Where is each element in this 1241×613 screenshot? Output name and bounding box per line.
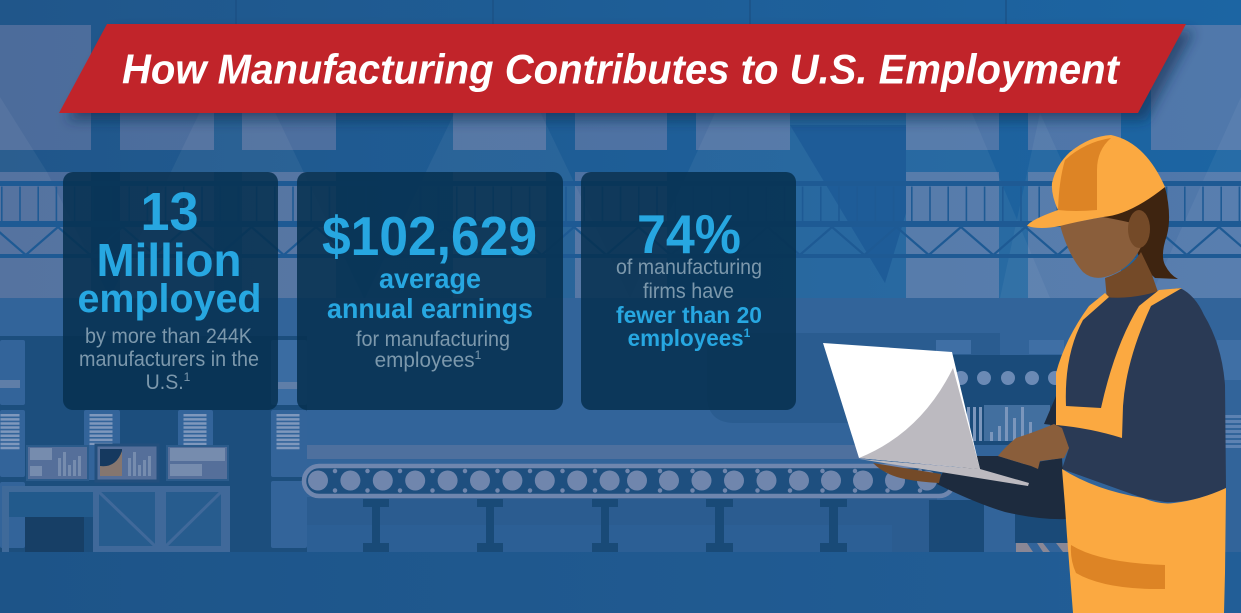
icon: ear bbox=[1128, 210, 1150, 248]
apron bbox=[1056, 288, 1226, 613]
panel: average annual earnings: annual earnings bbox=[327, 293, 533, 324]
monitors bbox=[27, 445, 228, 481]
floor bbox=[0, 552, 1241, 613]
server racks bbox=[0, 340, 307, 548]
dark inverted triangle bbox=[790, 125, 906, 283]
panel: average annual earnings: $102,629 bbox=[322, 205, 537, 267]
lower wall bbox=[0, 298, 1241, 552]
lower hand bbox=[873, 463, 941, 483]
panel: average annual earnings bbox=[297, 172, 563, 410]
desk bbox=[2, 486, 230, 552]
panel: 74 percent of firms: fewer than 20 bbox=[616, 302, 762, 328]
panel: 13 million employed: employed bbox=[78, 277, 262, 321]
right-side machine bbox=[929, 340, 1241, 552]
worker illustration bbox=[823, 135, 1226, 613]
body bbox=[1056, 288, 1226, 502]
rounded machine back bbox=[707, 333, 1000, 423]
conveyor supports bbox=[363, 499, 847, 552]
truss bbox=[0, 181, 1241, 258]
title: How Manufacturing Contributes to U.S. Employment bbox=[122, 46, 1121, 92]
panel: average annual earnings: average bbox=[379, 263, 481, 294]
icon: hair bbox=[1103, 187, 1178, 279]
panel: average annual earnings: employees bbox=[375, 349, 475, 372]
panel: 74 percent of firms: employees bbox=[628, 325, 744, 351]
icon: face bbox=[1060, 217, 1141, 278]
icon: hard hat bbox=[1027, 135, 1165, 228]
panel: 74 percent of firms: of manufacturing bbox=[616, 256, 762, 279]
panel: average annual earnings: for manufacturing bbox=[356, 328, 510, 351]
panel: 13 million employed: manufacturers in the bbox=[79, 348, 259, 371]
panel: 13 million employed: 1 bbox=[184, 370, 191, 384]
hand bbox=[998, 424, 1069, 469]
laptop bbox=[823, 343, 1029, 486]
panel: 13 million employed: 13 bbox=[140, 182, 198, 242]
panel: 13 million employed: Million bbox=[96, 234, 242, 286]
panel: 74 percent of firms bbox=[581, 172, 796, 410]
panel: 13 million employed: U.S. bbox=[146, 371, 184, 394]
light triangles bbox=[0, 60, 1241, 298]
panel: 74 percent of firms: 74% bbox=[637, 203, 741, 265]
panel: 74 percent of firms: firms have bbox=[643, 280, 734, 303]
icon: neck bbox=[1105, 252, 1159, 300]
panel: 74 percent of firms: 1 bbox=[744, 326, 751, 340]
upper window panels bbox=[0, 25, 1241, 298]
apron pocket bbox=[1071, 545, 1165, 589]
conveyor belt bbox=[304, 466, 954, 496]
panel: 13 million employed bbox=[63, 172, 278, 410]
back arm bbox=[937, 456, 1066, 519]
panel: average annual earnings: 1 bbox=[475, 348, 482, 362]
title banner bbox=[59, 24, 1194, 120]
panel: 13 million employed: by more than 244K bbox=[85, 325, 252, 348]
